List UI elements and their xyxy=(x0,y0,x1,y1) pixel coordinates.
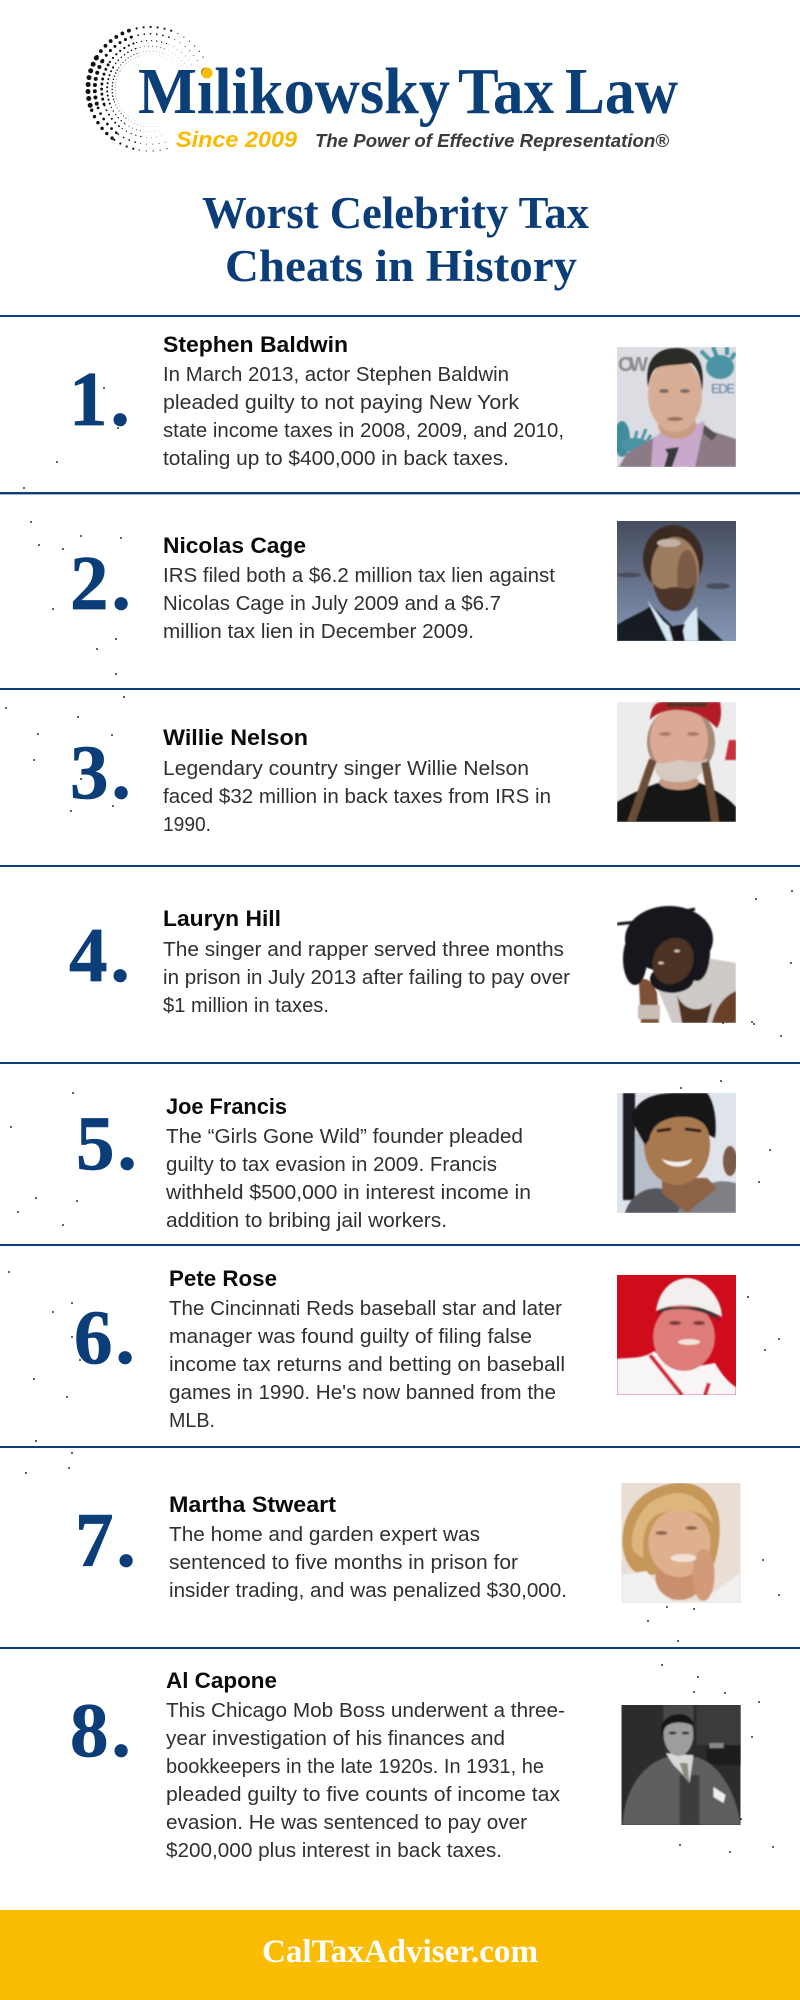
name: Pete Rose xyxy=(169,1266,277,1291)
name: Nicolas Cage xyxy=(163,533,306,558)
description: in prison in July 2013 after failing to pay over xyxy=(163,967,570,989)
description: 1990. xyxy=(163,814,211,836)
name: Stephen Baldwin xyxy=(163,332,348,357)
name: Al Capone xyxy=(166,1668,277,1693)
title: Worst Celebrity Tax xyxy=(202,188,589,238)
description: sentenced to five months in prison for xyxy=(169,1552,518,1574)
description xyxy=(165,1126,531,1232)
icon: photo of Lauryn Hill xyxy=(617,904,736,1023)
icon: photo of Nicolas Cage xyxy=(617,521,736,641)
description: pleaded guilty to five counts of income tax xyxy=(166,1784,560,1806)
description: year investigation of his finances and xyxy=(166,1728,505,1750)
description xyxy=(166,1700,565,1862)
number 8: 8. xyxy=(70,1687,134,1773)
description: addition to bribing jail workers. xyxy=(166,1210,447,1232)
number 2: 2. xyxy=(70,540,134,626)
description: totaling up to $400,000 in back taxes. xyxy=(163,448,509,470)
description: withheld $500,000 in interest income in xyxy=(165,1182,531,1204)
icon: photo of Joe Francis xyxy=(617,1093,736,1213)
panel: Pete Rose xyxy=(74,1266,736,1432)
name: Martha Stweart xyxy=(169,1492,337,1517)
panel: Nicolas Cage xyxy=(70,521,736,643)
description xyxy=(169,1524,567,1602)
panel: Willie Nelson xyxy=(70,702,736,836)
description: The Cincinnati Reds baseball star and later xyxy=(169,1298,562,1320)
description: state income taxes in 2008, 2009, and 2010, xyxy=(163,420,564,442)
logo wordmark: Tax xyxy=(458,55,554,128)
description: The singer and rapper served three months xyxy=(163,939,564,961)
description: insider trading, and was penalized $30,000. xyxy=(169,1580,567,1602)
description: faced $32 million in back taxes from IRS in xyxy=(163,786,551,808)
description xyxy=(163,758,551,836)
tagline: The Power of Effective Representation® xyxy=(315,131,670,151)
description: bookkeepers in the late 1920s. In 1931, he xyxy=(166,1756,544,1778)
icon: photo of Stephen Baldwin xyxy=(617,347,736,467)
description: evasion. He was sentenced to pay over xyxy=(166,1812,527,1834)
description: MLB. xyxy=(169,1410,215,1432)
description xyxy=(163,939,570,1017)
title: Cheats in History xyxy=(225,241,578,291)
description: $200,000 plus interest in back taxes. xyxy=(166,1840,502,1862)
panel: Stephen Baldwin xyxy=(69,332,736,470)
description: The home and garden expert was xyxy=(169,1524,480,1546)
icon: photo of Martha Stewart xyxy=(622,1483,740,1603)
number 1: 1. xyxy=(69,356,133,442)
footer banner xyxy=(0,1910,800,2000)
description: $1 million in taxes. xyxy=(163,995,329,1017)
description xyxy=(163,364,564,470)
number 6: 6. xyxy=(74,1294,138,1380)
icon: photo of Willie Nelson xyxy=(617,702,736,822)
since 2009: Since 2009 xyxy=(176,127,298,152)
icon: photo of Al Capone xyxy=(622,1705,741,1825)
description: IRS filed both a $6.2 million tax lien against xyxy=(163,565,555,587)
name: Willie Nelson xyxy=(163,725,308,750)
panel: Al Capone xyxy=(70,1668,740,1862)
description xyxy=(169,1298,565,1432)
description: Nicolas Cage in July 2009 and a $6.7 xyxy=(163,593,501,615)
logo wordmark: Milikowsky xyxy=(138,55,450,128)
description: manager was found guilty of filing false xyxy=(169,1326,532,1348)
description: The “Girls Gone Wild” founder pleaded xyxy=(166,1126,523,1148)
description: guilty to tax evasion in 2009. Francis xyxy=(166,1154,497,1176)
number 5: 5. xyxy=(76,1100,140,1186)
description: million tax lien in December 2009. xyxy=(163,621,474,643)
description: This Chicago Mob Boss underwent a three- xyxy=(166,1700,565,1722)
description: games in 1990. He's now banned from the xyxy=(169,1382,556,1404)
icon: dotted arc emblem xyxy=(88,27,203,151)
panel: Lauryn Hill xyxy=(69,903,736,1023)
description: pleaded guilty to not paying New York xyxy=(163,392,520,414)
description xyxy=(163,565,555,643)
number 7: 7. xyxy=(75,1497,139,1583)
title xyxy=(202,188,589,291)
logo wordmark: Law xyxy=(565,55,678,128)
panel: Joe Francis xyxy=(76,1093,737,1232)
description: Legendary country singer Willie Nelson xyxy=(163,758,529,780)
name: Lauryn Hill xyxy=(163,906,281,931)
panel: Martha Stweart xyxy=(75,1483,740,1603)
footer website: CalTaxAdviser.com xyxy=(262,1934,538,1970)
number 4: 4. xyxy=(69,912,133,998)
description: In March 2013, actor Stephen Baldwin xyxy=(163,364,509,386)
icon: photo of Stephen Baldwin: OW xyxy=(618,354,648,376)
description: income tax returns and betting on baseball xyxy=(169,1354,565,1376)
icon: photo of Pete Rose xyxy=(617,1275,736,1395)
number 3: 3. xyxy=(70,729,134,815)
logo xyxy=(88,27,678,152)
icon: photo of Stephen Baldwin: EDE xyxy=(711,381,735,396)
logo wordmark xyxy=(138,55,678,128)
name: Joe Francis xyxy=(166,1094,287,1119)
